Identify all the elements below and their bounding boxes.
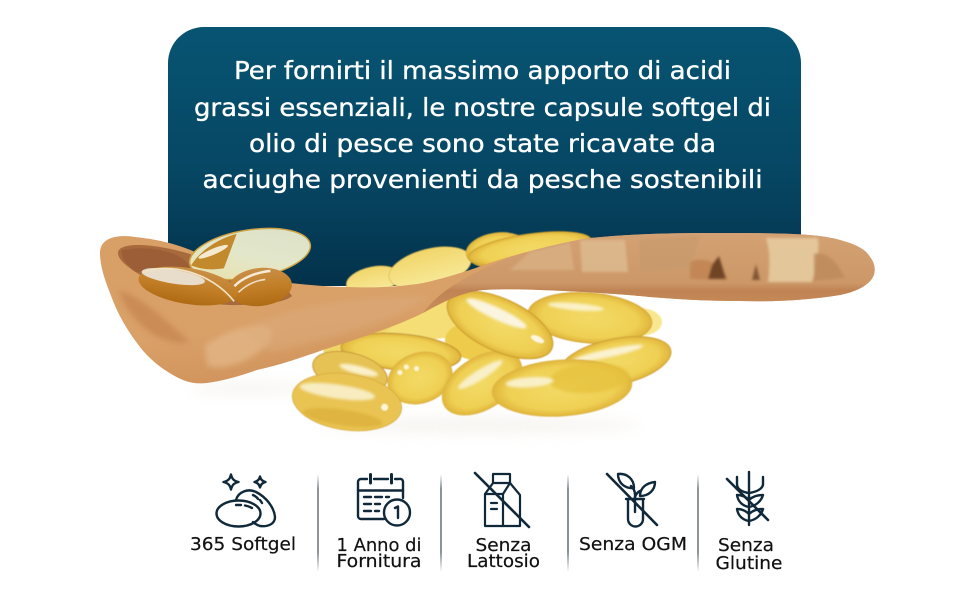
icon: crossed milk carton [475, 473, 529, 527]
dividers [318, 474, 698, 572]
panel: dark blue text card [168, 27, 801, 286]
feature: one year supply [336, 474, 422, 572]
icon: softgels and sparkles [216, 474, 275, 526]
feature: one year supply: 1 Anno di [336, 535, 422, 556]
capsule: centre lower [431, 338, 533, 428]
feature: gluten free [716, 472, 782, 574]
capsule: front right [490, 355, 634, 421]
feature: softgel [190, 474, 296, 555]
amber capsule left [136, 260, 240, 312]
feature: lactose free: Lattosio [467, 551, 540, 572]
feature: one year supply: Fornitura [336, 551, 422, 572]
capsule: left small [309, 344, 391, 400]
spoon body [100, 233, 875, 383]
amber capsule right [226, 265, 294, 309]
feature: GMO free [579, 474, 687, 555]
back capsules [320, 226, 662, 362]
soft shadows under spoon and capsules [190, 382, 640, 433]
pale capsule [186, 221, 314, 287]
capsule: central top [437, 277, 563, 373]
feature: lactose free [467, 473, 540, 572]
bowl interior [118, 245, 292, 305]
heading text: Per fornirti il massimo apporto di acidi [234, 56, 731, 85]
capsule: right middle [554, 328, 676, 396]
icon: calendar [358, 474, 410, 526]
feature row [190, 472, 782, 574]
capsule pile [289, 226, 676, 437]
feature: gluten free: Glutine [716, 553, 782, 574]
bowl shading [122, 248, 190, 272]
handle figure [423, 233, 875, 313]
feature: softgel: 365 Softgel [190, 534, 296, 555]
heading text: olio di pesce sono state ricavate da [249, 129, 716, 158]
capsules in spoon [136, 221, 314, 312]
feature: lactose free: Senza [476, 535, 532, 556]
capsule: centre round [380, 343, 460, 413]
heading text [194, 56, 771, 194]
capsule: front left [289, 367, 405, 437]
capsule: left long [340, 329, 462, 375]
wood grain marks [510, 236, 845, 282]
icon: crossed wheat [727, 472, 768, 525]
feature: gluten free: Senza [718, 535, 774, 556]
capsule: right rear [526, 288, 654, 348]
feature: GMO free: Senza OGM [579, 534, 687, 555]
icon: crossed plant in test tube [607, 474, 657, 527]
heading text: grassi essenziali, le nostre capsule softgel di [194, 93, 771, 122]
wooden spoon [100, 233, 875, 383]
heading text: acciughe provenienti da pesche sostenibili [202, 165, 762, 194]
